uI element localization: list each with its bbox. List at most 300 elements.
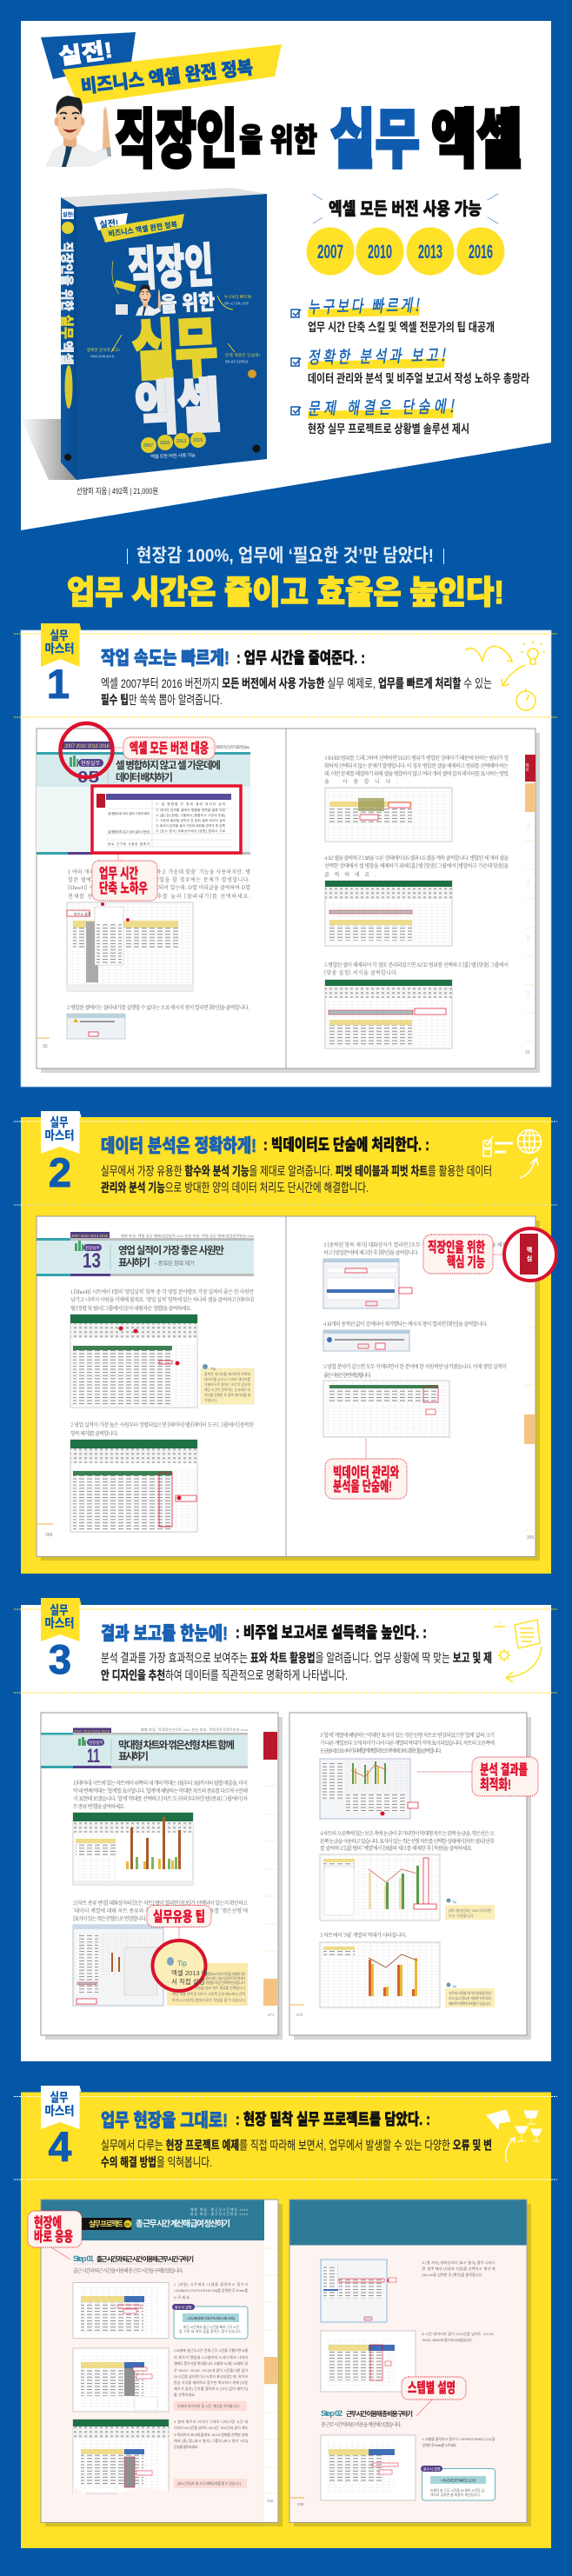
left page text: 전체를 선택하고 마우스 오른쪽 단추를 눌러 [잘라내기]를 선택하세요.	[68, 892, 250, 900]
callout: 업무 시간 단축 노하우	[92, 855, 157, 901]
page number: 346	[297, 2502, 304, 2506]
book cover title	[127, 241, 223, 443]
feature list: 업무 시간 단축 스킬 및 엑셀 전문가의 팁 대공개	[308, 321, 495, 334]
tab circle highlight	[504, 1228, 556, 1281]
side tabs: 기본	[526, 821, 530, 829]
body 3: 안 디자인을 추천하여 데이터를 직관적으로 명확하게 나타냅니다.	[101, 1668, 348, 1682]
page header: 셀 병합하지 않고 셀 가운데에	[116, 759, 221, 771]
dialog screenshot	[321, 2260, 496, 2322]
version badges	[306, 228, 504, 275]
right page text	[323, 1241, 507, 1437]
heading 2: : 빅데이터도 단숨에 처리한다. :	[263, 1136, 429, 1154]
right page text: 하고 [영업분야]에 체크한 후 [확인]을 클릭합니다.	[323, 1248, 419, 1256]
book cover version badges	[141, 432, 261, 460]
title: 직장인을 위한 실무 엑셀	[115, 104, 522, 176]
body 1: 엑셀 2007부터 2016 버전까지 모든 버전에서 사용 가능한 실무 예제로, 업무를 빠르게 처리할 수 있는	[101, 676, 492, 690]
formula box 2: I5셀의 총 근무 시간을 E2셀의 시간당 금	[430, 2488, 485, 2493]
left page step 2: 30	[43, 1044, 48, 1049]
project header: 실무 프로젝트	[89, 2220, 123, 2228]
body 1: 필수 팁만 쏙쏙 뽑아 알려줍니다.	[101, 693, 223, 707]
right page step 5: [맞춤 설정] 서식을 클릭합니다.	[324, 968, 398, 976]
right page step 5: 차트에 사용할 데이터 범위를 변경	[449, 1991, 492, 1995]
block 2: 24시간을 넘으면 다시 0부터 표시되었는데, 여기서	[174, 2373, 248, 2379]
highlight: feature table: ② 데이터 입력할 셀에서 병합할 영역을 블록 지정	[156, 808, 225, 812]
project header: 예제 파일: 총근무시간계산.xlsx	[190, 2207, 248, 2212]
page header: 2007 2010 2013 2016	[74, 1728, 110, 1734]
result screenshot	[321, 2331, 496, 2392]
body 2: 관리와 분석 기능으로 방대한 양의 데이터 처리도 단시간에 해결합니다.	[101, 1181, 369, 1195]
project header	[82, 2207, 248, 2230]
block 3: 누적되어서 표시해 볼게요. I5:I13 범위를 선택한 상태	[174, 2432, 248, 2437]
block 2: 셀에도 함수식을 복사합니다. I5셀과 I12셀, I13셀의 경	[174, 2360, 248, 2366]
tab circle highlight: 심	[527, 1255, 532, 1262]
tip box: [계열 차트 종류 변경]을 눌러 차트 종류를 선택합니다	[172, 1985, 245, 1990]
page header: 13	[83, 1249, 101, 1273]
feature list: 누구보다 빠르게!	[307, 293, 422, 319]
book spread 2	[37, 1216, 556, 1561]
side tabs	[264, 2248, 277, 2503]
block 2: 원상 서식을 제외하고 함수만 복사하기 위해 [자동	[174, 2380, 248, 2385]
block: sheet and formula: 1 J5셀을 클릭하고 함수식 ‘=I5*6*E2/TIME(1,0,0)’을	[422, 2436, 496, 2441]
right page text: 데, 이런 문제를 해결하기 위해 셀을 병합하지 않고 여러 개의 셀에 걸쳐 데이터를 표시하는 방법	[324, 769, 509, 777]
left page text: [Sheet1] 시트에서 D열 셀이 하나로 병합되어 있는데, D열 머리글을 클릭하여 D열	[68, 883, 250, 891]
right page step 4: [차트 필터] 단추는 2013 이후 버전	[449, 1908, 492, 1913]
right page step 5: 제외하여 명확히 표현할 수 있습니다.	[449, 2001, 491, 2006]
ribbon 4: 실무	[50, 2090, 69, 2104]
formula box 1: 퇴근 시간에서 출근 시간을 빼서 근무 시간	[183, 2325, 240, 2329]
block 2	[73, 2347, 248, 2412]
block 1: =SUM(D5-C5,F5-E5,H5-G5)를 입력한 후 Enter를	[174, 2287, 248, 2293]
callout: 현장에 바로 응용: 바로 응용	[34, 2229, 73, 2245]
screenshot	[325, 788, 452, 842]
page header: 막대형 차트와 꺾은선형 차트 함께	[118, 1739, 235, 1751]
page header: 현장실무	[89, 1740, 103, 1746]
right page step 5: 472	[296, 2013, 303, 2017]
block 1: 누르세요.	[174, 2294, 191, 2300]
right page step 4: 부터 지원합니다.	[449, 1914, 475, 1918]
callout: 실무유용 팁: 실무유용 팁	[153, 1909, 205, 1925]
version circle highlight	[61, 723, 113, 777]
block 2: 의 채우기 핸들을 I13셀까지 드래그해서 나머지	[174, 2354, 248, 2360]
page header: 데이터 배치하기	[116, 771, 173, 783]
side tabs: 서식	[526, 877, 530, 886]
book cover version badges: 2013	[176, 439, 186, 444]
page header: 11	[87, 1745, 100, 1767]
tip box: 해당 계열 선택 후 마우스 오른쪽 단추 메뉴에서 선택	[172, 1991, 245, 1996]
icons 3	[494, 1620, 542, 1682]
screenshot: 마우스 클릭	[74, 911, 91, 916]
left page text: 합된 셀에서는 정렬이나 필터 등의 작업을 할 경우에는 문제가 발생합니다.	[68, 875, 250, 883]
left page text: 1 여러 개의 셀을 합쳐 표시할 때 ‘병합하고 가운데 맞춤’ 기능을 사용하지만, 병	[68, 868, 250, 875]
block 1: 1 [파일] 시트에서 I5셀을 클릭하고 함수식	[174, 2281, 248, 2286]
body 2	[101, 1164, 492, 1195]
page header: 현장실무	[85, 1245, 100, 1251]
right page text: 5 영업 분야가 같으면 모두 삭제되면서 한 분야에 한 사원씩만 남겨졌습니다. 이제 영업 실적이	[323, 1362, 507, 1370]
right page step 4	[320, 1829, 495, 1920]
side tabs: 471	[268, 2013, 275, 2017]
banner: 비즈니스 엑셀 완전 정복: 비즈니스 엑셀 완전 정복	[80, 58, 254, 97]
spread 4 left page	[28, 2200, 283, 2526]
page header	[41, 1727, 248, 1768]
left page step 2: [표식이 있는 꺾은선형]으로 변경합니다.	[73, 1914, 147, 1922]
badge: 실전	[41, 32, 136, 79]
tip box: 하거나 [디자인] 탭에서 같은 작업을 할 수 있습니다	[172, 1997, 245, 2002]
heading 4: : 현장 밀착 실무 프로젝트를 담았다. :	[236, 2111, 430, 2128]
book spine title: 직장인을 위한	[59, 242, 75, 311]
project header: 총 근무 시간 계산해 급여 정산하기	[136, 2219, 230, 2229]
block 2: 채우기 옵션] 단추를 클릭하고 [서식 없이 채우기]	[174, 2386, 248, 2391]
book spine title	[59, 209, 75, 461]
tip circle highlight: Tip	[177, 1960, 187, 1967]
book mockup	[21, 188, 267, 480]
book spine title: 실전!	[63, 211, 74, 218]
right page text	[320, 1731, 495, 1754]
ribbon 3: 실무	[50, 1603, 69, 1617]
right page step 5	[324, 961, 530, 1055]
right page text: 3 ‘합계’ 계열에 해당하는 막대만 표식이 있는 꺾은선형 차트로 변경되었으면 ‘합계’ 값의 크기	[320, 1731, 495, 1739]
body 2: 실무에서 가장 유용한 함수와 분석 기능을 제대로 알려줍니다. 피벗 테이블과 피벗 차트를 활용한 데이터	[101, 1164, 492, 1178]
formula box 1: =SUM(D5-C5,F5-E5,H5-G5)	[187, 2316, 235, 2320]
tip circle highlight: 서 직접 설정	[171, 1977, 205, 1986]
step 02 heading	[321, 2409, 413, 2428]
callout: 현장에 바로 응용: 현장에	[34, 2215, 62, 2231]
ribbon 1: 실무	[50, 629, 69, 642]
right page step 5: Tip	[452, 1984, 457, 1988]
right page step 5: 하지 않고 필요한 계열만 차트에서	[449, 1996, 492, 2000]
title: 직장인을 위한 실무 엑셀: 직장인	[115, 104, 237, 176]
left page step 2	[73, 1899, 248, 2006]
book cover notes: 현장 실무 프로젝트로	[225, 359, 249, 363]
right page step 4: Tip	[452, 1900, 457, 1904]
formula box 1	[172, 2304, 248, 2339]
side tabs	[525, 755, 535, 1042]
callout: 스텝별 설명: 스텝별 설명	[408, 2380, 456, 2396]
right page step 5: 31	[525, 1050, 530, 1055]
block 3: 단추를 클릭하세요.	[174, 2444, 198, 2449]
section 3	[14, 1598, 557, 2061]
title: 직장인을 위한 실무 엑셀: 엑셀	[431, 104, 522, 176]
right page step 4	[324, 854, 509, 946]
left page text	[73, 1779, 248, 1810]
page header: 2007 2010 2013 2016	[64, 744, 110, 749]
section 1	[14, 623, 557, 1087]
spread 3 left page	[41, 1713, 283, 2040]
book cover version badges: 2016	[193, 438, 203, 443]
callout: 스텝별 설명	[402, 2377, 466, 2416]
heading 3: : 비주얼 보고서로 설득력을 높인다. :	[236, 1624, 427, 1641]
callout: 분석 결과를 최적화: 최적화!	[480, 1777, 511, 1793]
right page step 4: 른쪽 눈금을 사용하고 있습니다. 표식이 있는 꺾은선형 차트를 선택한 상태에서 [차트 필터] 단추	[320, 1837, 495, 1845]
icons 2	[483, 1130, 541, 1178]
formula box 2	[421, 2466, 496, 2500]
version heading	[313, 194, 498, 223]
number 4: 4	[49, 2125, 72, 2171]
callout: 업무 시간 단축 노하우: 업무 시간	[99, 866, 138, 882]
screenshot	[70, 1315, 197, 1408]
highlight: feature table: 바로 가기에 사용된 함축키	[108, 842, 150, 846]
tip circle highlight	[153, 1940, 208, 1991]
block 2: 를 선택하세요.	[174, 2392, 196, 2397]
highlight: feature table: ① 가운데 배치할 영역의 전 범위 셀에 데이터 입력	[156, 818, 225, 822]
block 2: 이때의 따라하면 합 시간 계산을 이어봅니다.	[177, 2404, 240, 2408]
tip box	[201, 1364, 254, 1404]
step 01 heading: 출근 시간과 퇴근 시간을 이용해 총 근무 시간을 구해보겠습니다.	[73, 2266, 183, 2274]
right page step 4: 를 클릭하고 [값] 탭의 ‘계열’에서 [3월]의 체크를 해제한 후 [적용]을 클릭하세요.	[320, 1844, 473, 1852]
tip box: 데이터를 남기고 나머지 데이터를	[204, 1377, 250, 1381]
tip box: 해당 조건이 만족하는 순서대로 데	[204, 1388, 250, 1392]
side tabs: 359	[527, 1535, 534, 1541]
heading 1: 작업 속도는 빠르게!	[101, 649, 229, 669]
formula box 2: 액으로 곱하면 총 비용이 계산됩니다.	[430, 2493, 481, 2497]
book cover version badges: 2007	[143, 443, 153, 449]
book cover title: 직장인	[127, 241, 215, 296]
right page step 4: 4 A2 셀을 클릭하고 Ctrl을 누른 상태에서 D5 셀과 G5 셀을 계속 클릭합니다. 병합된 세 개의 셀을	[324, 854, 509, 862]
callout: 빅데이터 관리와 분석을 단숨에: 분석을 단숨에!	[333, 1479, 392, 1494]
page header: 예제 파일: 막대꺾은선차트.xlsx 완성 파일: 막대꺾은선차트완성.xlsx	[141, 1727, 248, 1732]
callout: 분석 결과를 최적화: 분석 결과를	[480, 1762, 528, 1778]
block 2: 우 ‘00:00’, ‘00:20’, ‘00:20’과 같이 시간을 더한 값이	[174, 2367, 248, 2373]
book spread 1	[37, 723, 540, 1073]
book cover notes: 정확한 분석과 보고!	[87, 347, 120, 353]
book cover version badges: 엑셀 모든 버전 사용 가능	[150, 451, 196, 460]
project header: 05	[125, 2222, 130, 2227]
page header	[37, 1232, 254, 1276]
left page step 2: 2 [차트 종류 변경] 대화상자의 [모든 차트] 탭이 열리면 [콤보]가 선택되어 있는지 확인하고	[73, 1899, 248, 1907]
left page text	[70, 1288, 254, 1312]
block 3	[73, 2419, 248, 2497]
block: sheet and formula	[321, 2435, 496, 2500]
left page text	[68, 868, 250, 900]
tip box: 계열을 직접 선택해 변경합니다	[205, 1980, 245, 1985]
book cover title: 을 위한	[160, 290, 216, 316]
step 02 heading: 총 근무 시간에 따른 비용을 계산해 보겠습니다.	[321, 2420, 402, 2428]
book spine title: 엑셀	[59, 341, 74, 365]
block 1	[73, 2281, 248, 2339]
left page step 2: 358	[45, 1533, 53, 1538]
callout: 현장에 바로 응용	[28, 2211, 82, 2260]
right page text: 3 [중복된 항목 제거] 대화상자가 열리면 [모두 선택 취소]를 클릭하여 모든 선택을 해제	[323, 1241, 507, 1248]
book cover notes: 업무 시간 단축 스킬 및	[224, 301, 249, 305]
version badges: 2010	[368, 241, 392, 263]
callout: 업무 시간 단축 노하우: 단축 노하우	[99, 880, 148, 896]
section 2	[14, 1111, 557, 1574]
left page text: 1 [Sheet1] 시트에서 I열의 ‘영업실적’ 항목 중 각 영업 분야별로 가장 실적이 좋은 한 사원만	[70, 1288, 254, 1295]
subheadline: 현장감 100%, 업무에 ‘필요한 것’만 담았다!	[136, 546, 434, 566]
book cover version badges: 2010	[160, 441, 170, 446]
side tabs: 345	[267, 2499, 274, 2503]
left page step 2: 2 영업 실적이 가장 높은 사원부터 정렬되었으면 [데이터] 탭-[데이터 도구] 그룹에서 [중복된	[70, 1421, 254, 1428]
ribbon 1: 마스터	[45, 642, 75, 656]
step 01 heading	[73, 2254, 194, 2274]
page header: 표시하기	[118, 1256, 150, 1268]
spread 4 right page	[289, 2200, 531, 2526]
book cover title: 실무	[130, 312, 219, 389]
highlight: feature table: 셀 병합하지 않고 여러 셀의 가운데	[108, 829, 150, 834]
title: 직장인을 위한 실무 엑셀: 을 위한	[239, 123, 317, 159]
step 02 heading: 근무 시간 이용해 총 비용 구하기	[346, 2409, 413, 2418]
hero panel	[21, 21, 551, 530]
badge: 실전: 실전!	[57, 38, 114, 70]
body 3: 분석 결과를 가장 효과적으로 보여주는 표와 차트 활용법을 알려줍니다. 업무 상황에 딱 맞는 보고 및 제	[101, 1651, 492, 1665]
body 1	[101, 676, 492, 707]
feature list	[291, 293, 529, 436]
page header: 현장실무	[81, 760, 101, 767]
formula box 1: 함수식 설명	[175, 2304, 192, 2309]
block 2: 2 I5셀에 ‘총근무시간’ 전체 근무 시간을 구했으면 I5셀	[174, 2347, 248, 2353]
callout: 직장인을 위한 핵심 기능: 직장인을 위한	[428, 1240, 485, 1255]
version heading: 엑셀 모든 버전 사용 가능	[329, 199, 482, 219]
left page step 2: 2 병합된 셀에서는 잘라내기를 실행할 수 없다는 오류 메시지 창이 열리면 [확인]을 클릭합니다.	[67, 1003, 249, 1011]
number 1: 1	[47, 661, 70, 707]
screenshot	[67, 902, 193, 991]
page header: 영업 실적이 가장 좋은 사원만	[118, 1244, 224, 1256]
screenshot with chart	[73, 1813, 193, 1885]
book cover banners	[94, 213, 184, 243]
highlight: feature table: ① 셀 병합할 전 범위 셀에 데이터 입력	[156, 802, 225, 806]
block 3: 에서 [홈] 탭-[표시 형식] 그룹의 [표시 형식 서식]	[174, 2438, 248, 2443]
right page step 4: 4 차트의 오른쪽에 있는 보조 축에 눈금이 추가되면서 막대형 차트는 왼쪽 눈금을, 꺾은선은 오	[320, 1829, 495, 1837]
side tabs	[524, 1287, 535, 1541]
heading 3	[101, 1624, 427, 1644]
page header: 표시하기	[118, 1750, 149, 1762]
right page text: 4 18개의 중복된 값이 검색되어 제거했다는 메시지 창이 열리면 [확인]을 클릭합니다.	[323, 1320, 488, 1328]
left page text: 서 표현해 보겠습니다. ‘합계’ 막대를 선택하고 [차트 도구]의 [디자인] 탭-[종류] 그룹에서 [차	[73, 1794, 248, 1802]
left page text: 1 [데이터] 시트에 있는 차트에서 위쪽의 세 개의 막대는 1월부터 3월까지의 월별 매출을, 마지	[73, 1779, 248, 1787]
right page step 5: 5 차트에서 ‘3월’ 계열의 막대가 사라집니다.	[320, 1931, 407, 1939]
tip box	[167, 1963, 248, 2006]
banner: 비즈니스 엑셀 완전 정복	[63, 44, 282, 104]
callout: 엑셀 모든 버전 대응	[111, 737, 215, 759]
dialog screenshot: 면 ‘범주’에서 [사용자 지정]을 선택하고 ‘형식’에	[422, 2266, 496, 2271]
book cover illustration	[136, 284, 162, 316]
ribbon 2: 실무	[50, 1115, 69, 1129]
feature list: 현장 실무 프로젝트로 상황별 솔루션 제시	[308, 423, 469, 436]
ribbon 3	[41, 1598, 82, 1641]
callout: 엑셀 모든 버전 대응: 엑셀 모든 버전 대응	[130, 741, 209, 756]
tip box: 이터를 정렬한 후 중복 데이터를 제	[204, 1393, 250, 1397]
block 3: 이터의 24시간을 넘어도 26시간, 30시간과 같이 계속	[174, 2425, 248, 2430]
ribbon 2: 마스터	[45, 1128, 75, 1142]
step 01 heading: Step 01	[73, 2254, 94, 2263]
left page step 2: ‘데이터 계열에 대해 차트 종류와 축을 선택합니다’에서 차트 종류를 ‘꺾은선형’에	[73, 1907, 248, 1914]
ribbon 4: 마스터	[45, 2104, 75, 2118]
title: 직장인을 위한 실무 엑셀: 실무	[330, 104, 420, 176]
right page text: 3 E4:E8 범위를 드래그하여 선택하면 D5:F5 범위가 병합된 상태이기 때문에 원하는 범위가 정	[324, 754, 509, 762]
version badges: 2013	[418, 241, 442, 263]
right page step 5	[290, 1931, 495, 2017]
step 02 heading: Step 02	[321, 2409, 343, 2418]
page header: 05	[77, 769, 99, 786]
body 4: 실무에서 다루는 현장 프로젝트 예제를 직접 따라해 보면서, 업무에서 발생할 수 있는 다양한 오류 및 변	[101, 2139, 492, 2153]
heading 4: 업무 현장을 그대로!	[101, 2111, 228, 2131]
book cover notes: 누구보다 빠르게!	[224, 294, 251, 300]
body 4: 수의 해결 방법을 익혀봅니다.	[101, 2155, 212, 2169]
page header: 예제 파일: 엑셀 실무 예제/영업실적.xlsx 완성 파일: 엑셀 실무 예제/영업실적완성.xlsx	[121, 1233, 254, 1238]
feature list: 문제 해결은 단숨에!	[307, 394, 456, 421]
heading 1: : 업무 시간을 줄여준다. :	[236, 649, 365, 667]
right page step 4: 선택한 상태에서 셀 병합을 해제하기 위해 [홈] 탭-[맞춤] 그룹에서 [병합하고 가운데 맞춤]을	[324, 862, 509, 869]
heading 2	[101, 1136, 429, 1156]
book credit: 선양미 지음 | 492쪽 | 21,000원	[76, 487, 158, 496]
right page step 5: 5 병합된 셀이 해제되어 각 셀로 분리되었으면 A2:I2 범위를 선택하고 [홈] 탭-[맞춤] 그룹에서	[324, 961, 509, 968]
project header: 완성 파일: 총근무시간완성.xlsx	[190, 2212, 248, 2216]
ribbon 1	[41, 623, 82, 667]
highlight: feature table	[92, 786, 241, 853]
book cover notes	[87, 261, 260, 378]
page header: 2007 2010 2013 2016	[71, 1234, 108, 1238]
tip box: 콤보 차트 기능이 없으므로 데이터	[205, 1975, 245, 1980]
step 01 heading: 출근 시간과 퇴근 시간 이용해 근무 시간 구하기	[96, 2254, 194, 2263]
side tabs: 차트	[526, 990, 530, 998]
left page text: 탭-[정렬 및 필터] 그룹에서 [숫자 내림차순 정렬]을 클릭하세요.	[70, 1304, 192, 1312]
side tabs: 핵심	[525, 762, 530, 771]
right page text: 가 다른 계열보다 크게 차이가 나서 다른 계열의 막대가 작게 표시되었습니다. 차트의 오른쪽에	[320, 1739, 495, 1747]
illustration: office worker	[45, 96, 111, 167]
body 3	[101, 1651, 492, 1682]
highlight: feature table: ③ [홈] 탭-[맞춤] 그룹에서 [병합하고 가운데 맞춤]	[156, 813, 225, 817]
book cover notes: 데이터 관리와 분석 및	[90, 354, 115, 358]
version badges: 2016	[469, 241, 493, 263]
number 2: 2	[49, 1149, 71, 1195]
tip circle highlight: 엑셀 2013 이	[171, 1968, 208, 1977]
side tabs: 함수	[526, 934, 530, 942]
tip box: 중복된 데이터를 제거하면 위쪽에	[204, 1372, 250, 1376]
book spine title: 실무	[59, 315, 74, 339]
callout: 직장인을 위한 핵심 기능	[423, 1235, 504, 1274]
main headline: 업무 시간은 줄이고 효율은 높인다!	[67, 575, 504, 610]
tab circle highlight: 핵	[527, 1246, 532, 1254]
right page text: 확하게 선택되지 않는 문제가 발생합니다. 이 경우 병합된 셀을 해제하고 범위를 선택해야 하는	[324, 762, 509, 769]
right page text: 을 사용합니다.	[324, 777, 398, 785]
number 3: 3	[49, 1636, 71, 1682]
page number	[290, 2498, 304, 2506]
formula box 2: 함수식 설명	[423, 2466, 441, 2471]
left page text: 막 네 번째 막대는 ‘합계’를 표시합니다. ‘합계’에 해당하는 막대만 차트의 종류를 다르게 구분해	[73, 1787, 248, 1794]
heading 3: 결과 보고를 한눈에!	[101, 1624, 228, 1644]
icons 1	[465, 641, 545, 710]
right page text	[324, 754, 509, 785]
formula box 2: =I5-I5/E2/TIME(1,0,0)	[441, 2478, 476, 2483]
screenshot	[320, 1759, 418, 1819]
heading 4	[101, 2111, 430, 2131]
callout: 직장인을 위한 핵심 기능: 핵심 기능	[447, 1254, 485, 1270]
book cover notes: 문제 해결은 단숨에!	[225, 352, 260, 358]
highlight: feature table: ② 데이터 입력할 셀이 가운데 배치할 영역의 맨 왼쪽	[156, 823, 226, 828]
tip box: Tip	[210, 1367, 216, 1371]
dialog screenshot: 6 [셀 서식] 대화상자의 [표시 형식] 탭이 나타나	[422, 2260, 496, 2265]
block 3: 3 셀에 채우기 서식이 그대로 나타나면 시간 데	[174, 2419, 248, 2424]
callout: 분석 결과를 최적화	[417, 1757, 538, 1796]
result screenshot: 8 시간 데이터의 합이 24시간을 넘어도 ‘24:00’,	[422, 2331, 496, 2336]
right page text: 눈금을 따로 표시하기 위해 ‘합계’ 계열의 ‘보조 축’에 체크하고 [확인]을 클릭합니다.	[320, 1747, 442, 1754]
page header: 예제 파일: 실무대표파일.xlsx	[216, 744, 250, 750]
ribbon 3: 마스터	[45, 1616, 75, 1630]
page header	[37, 742, 250, 855]
block 3: [표시 단추]로 셀 서식 대화상자를 열 수 있습니다.	[177, 2481, 242, 2486]
left page text: 트 종류 변경]을 클릭하세요.	[73, 1802, 125, 1810]
callout: 실무유용 팁	[147, 1906, 211, 1939]
dialog screenshot: [h]:mm을 입력한 후 [확인]을 클릭합니다.	[422, 2272, 483, 2277]
left page step 2	[37, 1003, 249, 1049]
formula box 1: 을 구한 세 개의 값을 합하는 함수식입니다.	[179, 2329, 242, 2333]
left page text: 남기고 나머지 사원을 삭제해 볼게요. ‘영업 실적’ 항목에 있는 하나의 셀을 클릭하고 [데이터]	[70, 1295, 254, 1303]
page header: – 중복된 항목 제거	[154, 1259, 195, 1267]
callout: 빅데이터 관리와 분석을 단숨에: 빅데이터 관리와	[333, 1464, 399, 1481]
icons 4	[487, 2110, 542, 2162]
result screenshot: ‘24:20’, ‘26:20’과 같이 표시되었습니다.	[422, 2337, 473, 2342]
heading 1	[101, 649, 365, 669]
ribbon 2	[41, 1111, 82, 1154]
